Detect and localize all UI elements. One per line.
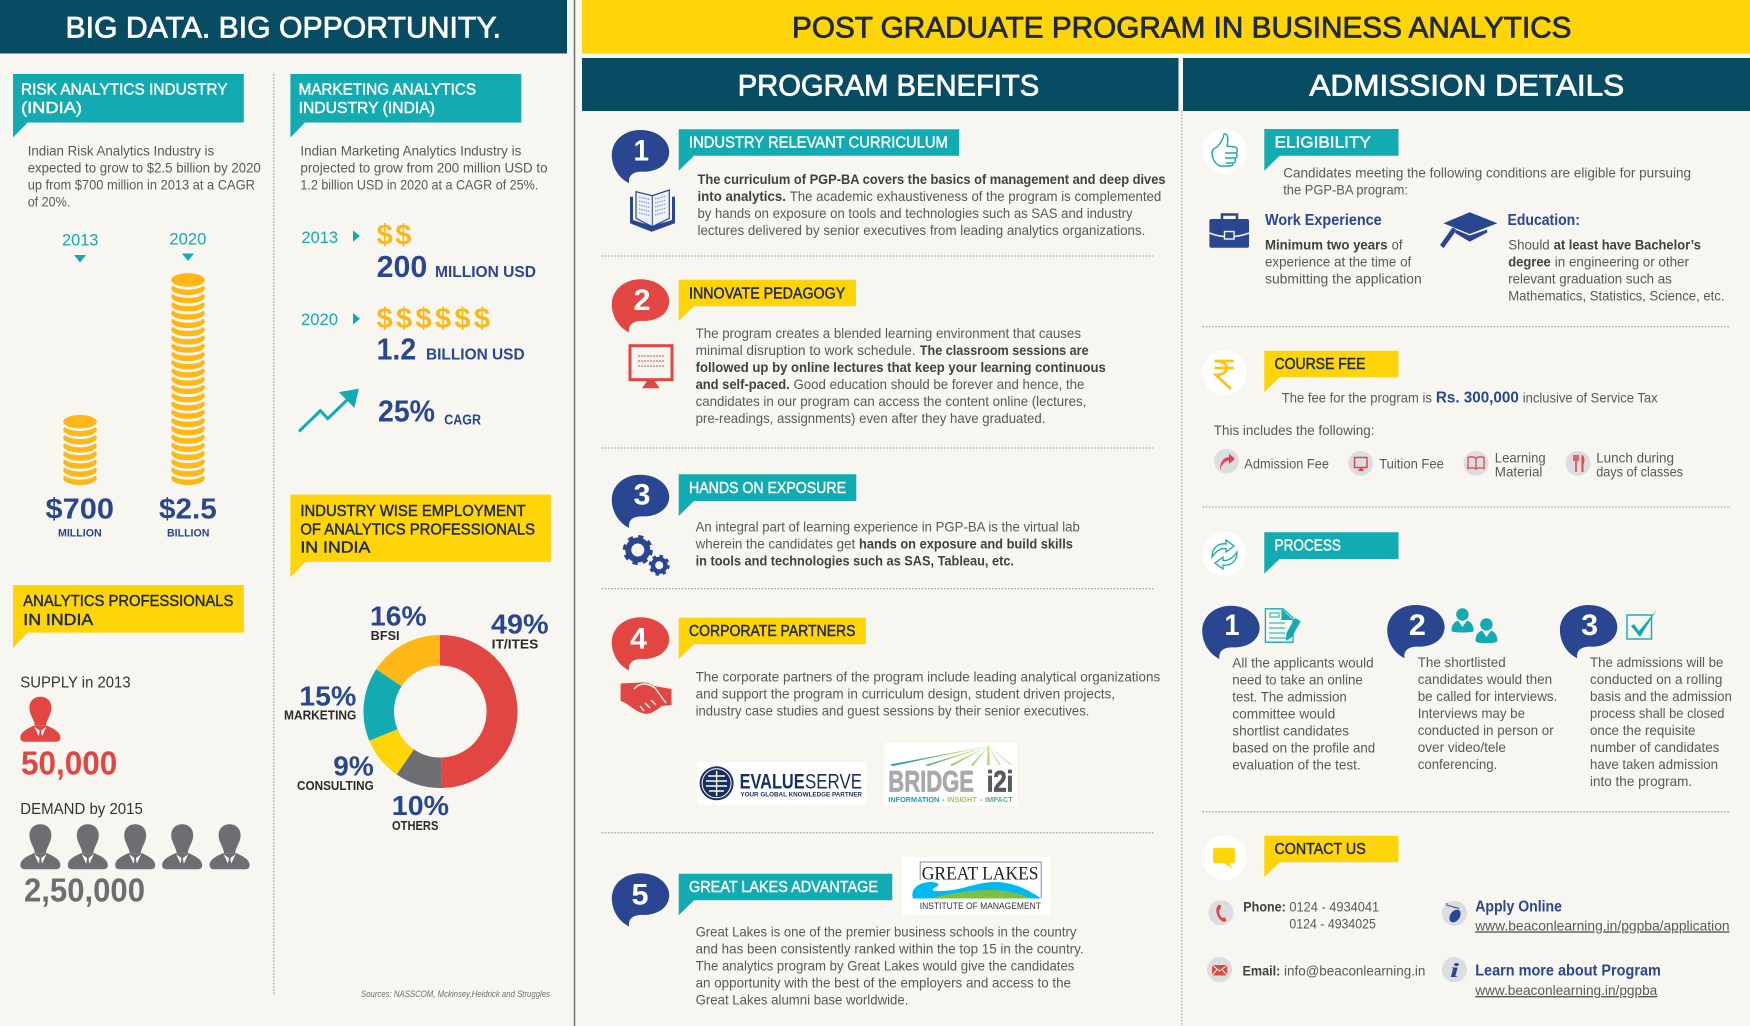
coin stack 2020: BILLION — [167, 527, 209, 539]
text: curriculum description: by hands on exposure on tools and technologies such as SAS and industry — [698, 205, 1133, 221]
contact: phone: 0124 - 4934025 — [1289, 915, 1376, 931]
logo: bridge i2i: BRIDGE — [888, 766, 974, 799]
number bubble 1: 1 — [634, 135, 649, 168]
label: course fee: COURSE FEE — [1274, 356, 1365, 373]
label: contact us: CONTACT US — [1274, 841, 1366, 858]
text: includes: This includes the following: — [1214, 422, 1374, 438]
donut chart: employment by industry: 9% — [333, 750, 374, 782]
label: corporate partners: CORPORATE PARTNERS — [689, 623, 856, 640]
step 3: The admissions will be — [1590, 654, 1724, 670]
label: innovate pedagogy — [679, 280, 856, 321]
label: course fee — [1264, 351, 1398, 392]
education: relevant graduation such as — [1508, 270, 1672, 286]
demand stat: DEMAND by 2015 — [20, 801, 143, 818]
label: hands on exposure: HANDS ON EXPOSURE — [689, 480, 846, 497]
title banner: post graduate program: POST GRADUATE PROGRAM IN BUSINESS ANALYTICS — [792, 11, 1572, 44]
logo: evalueserve — [697, 762, 866, 805]
contact: email: Email: — [1242, 962, 1280, 978]
text: risk analytics description: of 20%. — [28, 193, 70, 209]
step 1: 1 — [1224, 609, 1240, 642]
text: curriculum description: lectures delivered by senior executives from leading analytics organizations. — [698, 222, 1145, 238]
work experience: of — [1392, 236, 1403, 252]
heading: industry wise employment — [290, 495, 551, 577]
stat: marketing 2013: 2013 — [302, 228, 338, 247]
text: marketing analytics description: Indian Marketing Analytics Industry is — [300, 143, 521, 159]
text: eligibility intro — [1283, 164, 1691, 197]
benefit 4: corporate partners — [612, 617, 1160, 806]
step 3: into the program. — [1590, 773, 1692, 789]
step 3: process shall be closed — [1590, 705, 1724, 721]
logo: bridge i2i: IMPACT — [985, 795, 1013, 804]
benefit 5: great lakes advantage — [612, 857, 1084, 1008]
text: pedagogy description: pre-readings, assignments) even after they have graduated. — [696, 410, 1045, 426]
work experience — [1265, 212, 1422, 286]
education — [1508, 212, 1724, 303]
section: course fee — [1202, 350, 1683, 480]
icon: graduation cap — [1440, 212, 1497, 248]
step 1: based on the profile and — [1232, 739, 1375, 755]
work experience: Minimum two years — [1265, 236, 1388, 252]
education: in engineering or other — [1555, 253, 1689, 269]
text: pedagogy description: Good education should be forever and hence, the — [794, 376, 1085, 392]
text: curriculum description: The academic exhaustiveness of the program is complemented — [790, 188, 1161, 204]
icon: checkbox — [1627, 610, 1657, 639]
step 2: over video/tele — [1418, 739, 1506, 755]
text: partners description: The corporate partners of the program include leading analytical organizations — [696, 669, 1160, 685]
label: industry relevant curriculum: INDUSTRY RELEVANT CURRICULUM — [689, 134, 948, 151]
supply stat — [20, 675, 131, 781]
item: tuition fee: Tuition Fee — [1379, 456, 1444, 472]
step 1: evaluation of the test. — [1232, 756, 1361, 772]
donut chart: employment by industry: BFSI — [371, 629, 400, 643]
heading: risk analytics: (INDIA) — [21, 100, 82, 117]
text: pedagogy description: and self-paced. — [696, 376, 790, 392]
heading: marketing analytics — [290, 74, 521, 138]
stat: 25% CAGR with arrow: CAGR — [444, 412, 481, 429]
panel: big data — [0, 0, 567, 1000]
step 1: shortlist candidates — [1232, 722, 1349, 738]
text: great lakes description: The analytics program by Great Lakes would give the candidates — [696, 958, 1074, 974]
step 1: committee would — [1232, 705, 1335, 721]
heading: analytics professionals — [13, 585, 244, 648]
item: learning material: Material — [1495, 464, 1542, 480]
contact: learn more: www.beaconlearning.in/pgpba — [1474, 982, 1657, 998]
text: pedagogy description: The program creates a blended learning environment that causes — [696, 325, 1081, 341]
text: exposure description: in tools and technologies such as SAS, Tableau, etc. — [696, 552, 1014, 568]
label: process: PROCESS — [1274, 538, 1341, 555]
contact: email: info@beaconlearning.in — [1284, 962, 1425, 978]
coin stack 2020: $2.5 — [159, 494, 217, 526]
benefit 3: hands on exposure — [612, 474, 1080, 574]
text: pedagogy description: followed up by online lectures that keep your learning continuous — [696, 359, 1106, 375]
text: pedagogy description — [696, 325, 1106, 426]
text: exposure description: An integral part of learning experience in PGP-BA is the virtual lab — [696, 518, 1080, 534]
stat: marketing 2013: 200 — [377, 249, 427, 284]
contact: apply online: www.beaconlearning.in/pgpba/application — [1474, 917, 1730, 933]
donut chart: employment by industry: 16% — [370, 600, 427, 631]
donut chart: employment by industry: 49% — [491, 608, 549, 639]
donut chart: employment by industry: 15% — [299, 680, 356, 711]
text: partners description — [696, 669, 1160, 719]
stat: marketing 2020: BILLION USD — [426, 347, 525, 364]
item: lunch: days of classes — [1596, 464, 1683, 480]
text: fee amount: inclusive of Service Tax — [1523, 390, 1658, 406]
item: learning material: Learning — [1495, 449, 1546, 465]
text: eligibility intro: Candidates meeting the following conditions are eligible for pursuing — [1283, 164, 1691, 180]
heading: risk analytics: RISK ANALYTICS INDUSTRY — [21, 82, 228, 99]
heading: industry wise employment: IN INDIA — [300, 540, 371, 556]
step 1: need to take an online — [1232, 671, 1363, 687]
number bubble 5 — [612, 873, 669, 927]
text: risk analytics description: up from $700 million in 2013 at a CAGR — [28, 176, 255, 192]
text: fee amount: The fee for the program is — [1282, 390, 1432, 406]
education: at least have Bachelor’s — [1554, 236, 1701, 252]
logo: bridge i2i: i2i — [987, 766, 1013, 799]
text: curriculum description: into analytics. — [698, 188, 786, 204]
step 2: Interviews may be — [1418, 705, 1525, 721]
text: curriculum description: The curriculum of PGP-BA covers the basics of management and deep dives — [698, 171, 1166, 187]
label: corporate partners — [679, 618, 866, 659]
icon: cycle arrows — [1202, 532, 1247, 577]
heading: risk analytics — [13, 74, 244, 138]
icon: rupee — [1202, 350, 1247, 395]
work experience: Work Experience — [1265, 212, 1382, 229]
number bubble 2: 2 — [634, 284, 650, 317]
label: great lakes advantage: GREAT LAKES ADVANTAGE — [689, 879, 878, 896]
demand stat — [20, 801, 250, 909]
icon: people — [1452, 608, 1497, 643]
label: eligibility: ELIGIBILITY — [1274, 134, 1371, 151]
logo: evalueserve: SERVE — [805, 770, 862, 793]
icon: chat bubble — [1202, 835, 1247, 880]
label: process — [1264, 532, 1398, 574]
work experience: submitting the application — [1265, 270, 1422, 286]
title banner: post graduate program — [582, 0, 1750, 54]
text: great lakes description: and has been consistently ranked within the top 15 in the country. — [696, 941, 1084, 957]
number bubble 3 — [612, 475, 669, 528]
text: risk analytics description: Indian Risk Analytics Industry is — [28, 143, 214, 159]
label: innovate pedagogy: INNOVATE PEDAGOGY — [689, 285, 845, 302]
logo: great lakes: INSTITUTE OF MANAGEMENT — [920, 901, 1041, 911]
item: tuition fee — [1348, 451, 1444, 476]
number bubble 5: 5 — [632, 879, 648, 912]
text: risk analytics description: expected to grow to $2.5 billion by 2020 — [28, 160, 261, 176]
stat: marketing 2020: 1.2 — [377, 332, 416, 367]
heading: analytics professionals: IN INDIA — [23, 612, 94, 629]
coin stack 2013: 2013 — [62, 231, 98, 250]
number bubble 2 — [612, 279, 669, 333]
logo: evalueserve: EVALUE — [740, 770, 805, 793]
label: hands on exposure — [679, 474, 856, 516]
number bubble 3: 3 — [634, 478, 650, 511]
heading: marketing analytics: INDUSTRY (INDIA) — [299, 100, 435, 117]
heading: admission details — [1183, 58, 1750, 111]
text: great lakes description — [696, 924, 1084, 1008]
label: contact us — [1264, 836, 1398, 877]
logo: bridge i2i — [885, 743, 1017, 806]
text: pedagogy description: minimal disruption to work schedule. — [696, 342, 916, 358]
item: lunch: Lunch during — [1596, 449, 1674, 465]
icon: handshake — [621, 682, 672, 714]
education: Should — [1508, 236, 1550, 252]
step 1: test. The admission — [1232, 688, 1347, 704]
heading: industry wise employment: OF ANALYTICS PROFESSIONALS — [300, 521, 535, 538]
logo: evalueserve: YOUR GLOBAL KNOWLEDGE PARTNER — [740, 792, 862, 799]
text: risk analytics description — [28, 143, 261, 209]
logo: bridge i2i: INSIGHT — [947, 795, 977, 804]
education: degree — [1508, 253, 1551, 269]
title banner: big data: BIG DATA. BIG OPPORTUNITY. — [66, 12, 501, 44]
step 3: conducted on a rolling — [1590, 671, 1722, 687]
text: fee amount — [1282, 390, 1658, 407]
chart: coin stacks — [46, 229, 217, 539]
contact: phone: 0124 - 4934041 — [1289, 898, 1379, 914]
education: Mathematics, Statistics, Science, etc. — [1508, 287, 1724, 303]
text: exposure description — [695, 518, 1080, 568]
contact: email — [1207, 957, 1425, 982]
contact: phone: Phone: — [1243, 898, 1286, 914]
coin stack 2013: MILLION — [58, 527, 102, 539]
donut chart: employment by industry: 10% — [392, 790, 449, 821]
stat: marketing 2013: MILLION USD — [435, 264, 536, 281]
donut chart: employment by industry: MARKETING — [284, 708, 356, 722]
heading: marketing analytics: MARKETING ANALYTICS — [299, 82, 476, 99]
work experience: experience at the time of — [1265, 253, 1411, 269]
contact: phone — [1208, 898, 1379, 931]
label: great lakes advantage — [679, 874, 892, 915]
stat: marketing 2020: 2020 — [301, 310, 338, 329]
text: great lakes description: an opportunity with the best of the employers and access to the — [696, 975, 1071, 991]
item: admission fee — [1214, 449, 1329, 474]
icon: monitor — [630, 346, 672, 388]
item: admission fee: Admission Fee — [1244, 456, 1329, 472]
section: eligibility — [1202, 129, 1724, 303]
education: Education: — [1508, 212, 1580, 229]
donut chart: employment by industry: CONSULTING — [297, 779, 374, 793]
number bubble 4 — [612, 617, 669, 671]
supply stat: SUPPLY in 2013 — [20, 675, 131, 692]
benefit 1: industry relevant curriculum — [612, 129, 1166, 238]
logo: bridge i2i: - — [942, 795, 945, 804]
donut chart: employment by industry: IT/ITES — [492, 637, 538, 651]
text: marketing analytics description — [300, 143, 548, 192]
text: exposure description: wherein the candidates get — [695, 535, 855, 551]
step 3: number of candidates — [1590, 739, 1719, 755]
step 1: All the applicants would — [1232, 654, 1374, 670]
stat: marketing 2013: $$ — [377, 220, 411, 252]
step 2: The shortlisted — [1418, 654, 1506, 670]
step 3: 3 — [1581, 609, 1598, 642]
stat: marketing 2013 — [302, 220, 536, 284]
contact: learn more — [1442, 957, 1661, 998]
step 3: have taken admission — [1590, 756, 1718, 772]
icon: briefcase — [1209, 214, 1249, 248]
text: partners description: and support the program in curriculum design, student driven projects, — [696, 686, 1115, 702]
step 2 — [1387, 605, 1557, 772]
panel: program benefits — [582, 58, 1178, 1008]
heading: program benefits: PROGRAM BENEFITS — [738, 70, 1039, 103]
step 2: be called for interviews. — [1418, 688, 1557, 704]
text: great lakes description: Great Lakes is one of the premier business schools in the country — [696, 924, 1076, 940]
panel: admission details — [1183, 58, 1750, 998]
coin stack 2020: 2020 — [169, 229, 206, 248]
step 2: conferencing. — [1418, 756, 1497, 772]
stat: marketing 2020: $$$$$$ — [377, 303, 490, 335]
contact: apply online — [1442, 898, 1730, 933]
contact: apply online: Apply Online — [1475, 898, 1562, 915]
stat: 25% CAGR with arrow: 25% — [378, 393, 435, 428]
title banner: big data — [0, 0, 567, 54]
heading: program benefits — [582, 58, 1178, 111]
sources note: Sources: NASSCOM, Mckinsey,Heidrick and Struggles — [361, 989, 550, 1000]
text: great lakes description: Great Lakes alumni base worldwide. — [696, 992, 908, 1008]
step 1 — [1202, 606, 1375, 772]
logo: great lakes: GREAT LAKES — [922, 863, 1038, 884]
text: curriculum description — [698, 171, 1166, 238]
supply stat: 50,000 — [21, 744, 117, 781]
text: eligibility intro: the PGP-BA program: — [1283, 181, 1408, 197]
contact: learn more: Learn more about Program — [1475, 963, 1661, 980]
step 3: basis and the admission — [1590, 688, 1732, 704]
icon: document — [1265, 609, 1301, 642]
coin stack 2020 — [159, 229, 217, 539]
coin stack 2013: $700 — [46, 494, 114, 526]
demand stat: 2,50,000 — [24, 872, 145, 909]
logo: bridge i2i: INFORMATION — [888, 795, 939, 804]
step 2: 2 — [1409, 609, 1426, 642]
donut chart: employment by industry — [284, 600, 549, 833]
logo: great lakes — [902, 857, 1050, 915]
text: marketing analytics description: projected to grow from 200 million USD to — [300, 160, 548, 176]
benefit 2: innovate pedagogy — [612, 279, 1106, 426]
text: fee amount: Rs. 300,000 — [1436, 390, 1519, 407]
contact: learn more: i — [1450, 960, 1460, 982]
item: lunch — [1566, 449, 1683, 480]
icon: thumbs up — [1202, 129, 1247, 174]
text: pedagogy description: The classroom sessions are — [920, 342, 1089, 358]
section: contact us — [1202, 835, 1730, 998]
step 2: conducted in person or — [1418, 722, 1554, 738]
coin stack 2013 — [46, 231, 114, 539]
step 2: candidates would then — [1418, 671, 1552, 687]
stat: 25% CAGR with arrow — [299, 389, 481, 431]
donut chart: employment by industry: OTHERS — [392, 819, 438, 833]
text: partners description: industry case studies and guest sessions by their senior executives. — [696, 703, 1089, 719]
item: learning material — [1464, 449, 1546, 480]
heading: industry wise employment: INDUSTRY WISE EMPLOYMENT — [300, 503, 526, 520]
label: eligibility — [1264, 129, 1398, 171]
logo: bridge i2i: - — [980, 795, 983, 804]
text: pedagogy description: candidates in our program can access the content online (lectures, — [696, 393, 1086, 409]
heading: admission details: ADMISSION DETAILS — [1309, 69, 1624, 102]
step 3: once the requisite — [1590, 722, 1696, 738]
text: exposure description: hands on exposure and build skills — [859, 535, 1073, 551]
number bubble 1 — [612, 130, 669, 183]
heading: analytics professionals: ANALYTICS PROFESSIONALS — [23, 593, 233, 610]
icon: gears — [625, 537, 668, 574]
stat: marketing 2020 — [301, 303, 525, 367]
text: marketing analytics description: 1.2 billion USD in 2020 at a CAGR of 25%. — [300, 176, 538, 192]
step 3 — [1560, 605, 1732, 789]
label: industry relevant curriculum — [679, 129, 959, 171]
icon: open book — [630, 190, 675, 232]
number bubble 4: 4 — [630, 623, 647, 656]
section: process — [1202, 532, 1732, 789]
